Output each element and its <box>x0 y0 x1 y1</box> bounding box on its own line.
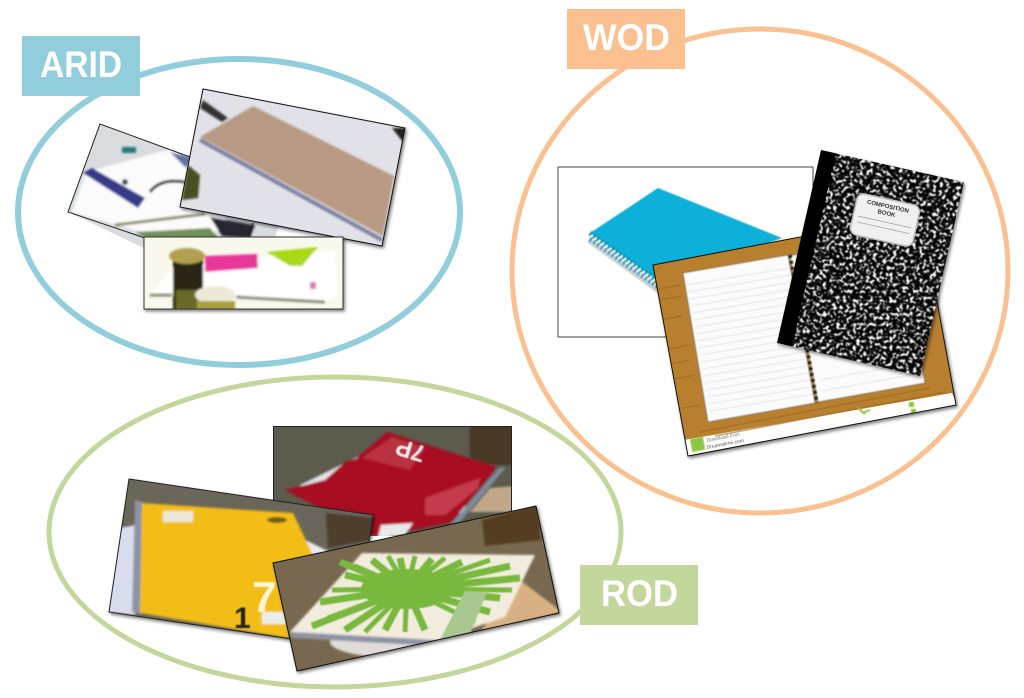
panel: ROD group <box>49 377 621 687</box>
photo: open notebook on wood: Dreamstime.com <box>706 438 744 451</box>
photo: yellow notebook <box>108 478 377 644</box>
photo: green patterned notebook <box>273 505 562 671</box>
photo: patterned notebook, blurred <box>67 123 278 248</box>
ROD ellipse outline <box>49 377 621 687</box>
label: WOD <box>567 9 685 69</box>
photo: brown notebook, blurred <box>180 89 408 246</box>
photo: jars and pink-green notebook, blurred <box>144 237 343 310</box>
panel: WOD group <box>512 29 1008 513</box>
photo: composition book <box>770 145 970 380</box>
label: WOD: WOD <box>583 17 670 58</box>
small credit text: Download from <box>706 432 740 444</box>
label: ROD <box>580 565 698 625</box>
composition book label: BOOK <box>877 209 896 219</box>
label: ROD: ROD <box>601 573 678 614</box>
photo: yellow notebook: 1 <box>234 602 251 635</box>
notebook cover number: 7P <box>393 433 429 467</box>
photo: open notebook on wood <box>653 214 958 458</box>
label: ARID: ARID <box>40 44 122 85</box>
WOD circle outline <box>512 29 1008 513</box>
photo: blue spiral notebook <box>558 167 813 337</box>
panel: ARID group <box>18 59 460 365</box>
composition book label <box>849 193 921 247</box>
composition book label: COMPOSITION <box>866 200 909 215</box>
yellow cover numerals: 7 <box>252 573 276 622</box>
label: ARID <box>22 36 140 96</box>
photo: red notebook <box>273 424 514 540</box>
ARID ellipse outline <box>18 59 460 365</box>
